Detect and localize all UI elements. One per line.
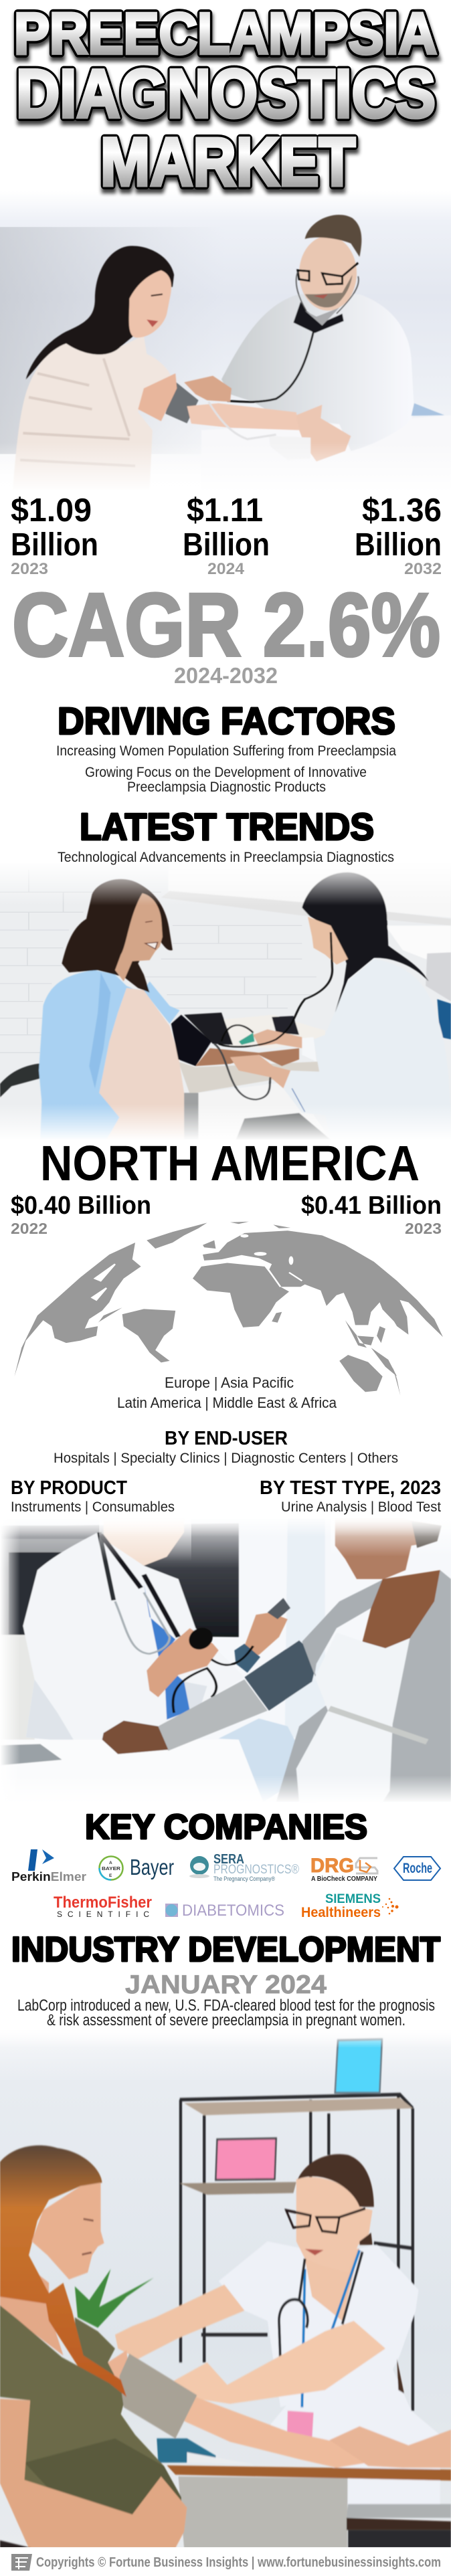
nurse arm lower <box>170 2321 385 2404</box>
pants <box>219 1718 299 1802</box>
patient hand <box>102 1721 168 1754</box>
patient arm <box>195 1048 299 1066</box>
photo: nurse fitting cuff on pregnant woman <box>0 2031 451 2548</box>
market value 2032: $1.36 <box>362 492 442 529</box>
patient hair <box>62 879 173 992</box>
desk <box>179 2476 347 2548</box>
patient hair <box>0 2145 126 2397</box>
by end-user <box>54 1428 398 1466</box>
logo: Bayer: Bayer <box>130 1855 174 1879</box>
doctor head <box>299 236 357 310</box>
tablet <box>184 1012 233 1045</box>
nurse uniform lower <box>270 2366 440 2504</box>
desk clutter <box>157 2438 215 2462</box>
lanyard and stethoscope <box>302 2250 359 2407</box>
heading: key companies: KEY COMPANIES <box>85 1808 367 1847</box>
doctor coat <box>283 959 451 1139</box>
regional value 2022: 2022 <box>11 1220 48 1237</box>
logo: Siemens Healthineers <box>301 1892 399 1920</box>
patient cardigan <box>276 1579 384 1802</box>
patient face <box>115 893 163 982</box>
by product: Instruments | Consumables <box>11 1499 175 1515</box>
by test type <box>260 1477 441 1515</box>
nurse neck <box>305 2248 359 2321</box>
logo: PerkinElmer: PerkinElmer <box>11 1870 86 1883</box>
by test type: Urine Analysis | Blood Test <box>281 1499 441 1515</box>
arm and hands <box>187 403 299 430</box>
doctor shirt <box>221 294 414 451</box>
patient sleeve <box>158 1679 268 1751</box>
market value 2024: 2024 <box>207 560 245 578</box>
nurse uniform upper <box>219 2241 418 2407</box>
other regions: Latin America | Middle East & Africa <box>117 1394 337 1411</box>
doctor hand and bulb <box>147 1628 219 1697</box>
by test type: BY TEST TYPE, 2023 <box>260 1477 441 1499</box>
logo: Thermo Fisher Scientific <box>54 1894 152 1919</box>
logo: Roche <box>394 1857 440 1880</box>
regional value 2023: 2023 <box>405 1220 442 1237</box>
patient tee <box>0 2305 181 2514</box>
logo: Diabetomics: DIABETOMICS <box>182 1902 284 1920</box>
market value 2032 <box>355 492 442 578</box>
glasses <box>298 263 358 284</box>
market value 2023 <box>11 492 98 578</box>
logo: Thermo Fisher Scientific: ThermoFisher <box>54 1894 152 1912</box>
collar and stethoscope <box>293 302 344 333</box>
footer logo <box>11 2554 32 2571</box>
date: JANUARY 2024 <box>125 1970 327 1999</box>
logo: Siemens Healthineers: Healthineers <box>301 1905 381 1920</box>
hand from right <box>329 2426 451 2468</box>
black cuff <box>171 1015 211 1066</box>
frames <box>335 2039 382 2093</box>
patient face <box>31 2183 104 2280</box>
logo: Sera Prognostics <box>189 1852 299 1882</box>
badge <box>287 2411 314 2438</box>
by end-user: Hospitals | Specialty Clinics | Diagnostic Centers | Others <box>54 1451 398 1466</box>
other regions <box>117 1374 337 1411</box>
logo: Bayer <box>99 1855 174 1880</box>
by end-user: BY END-USER <box>165 1428 288 1449</box>
logo: Thermo Fisher Scientific: SCIENTIFIC <box>57 1910 149 1919</box>
cuff <box>165 382 199 424</box>
CAGR period: 2024-2032 <box>174 663 278 688</box>
latest trends text: Technological Advancements in Preeclampsia Diagnostics <box>58 850 394 865</box>
patient chest <box>0 2262 64 2355</box>
market value 2023: 2023 <box>11 560 48 578</box>
logo: DRG: A BioCheck COMPANY <box>311 1875 377 1883</box>
blood pressure cuff <box>244 1641 318 1711</box>
stethoscope <box>99 1532 114 1600</box>
logo: PerkinElmer <box>11 1849 86 1883</box>
title: MARKET <box>101 128 356 204</box>
market value 2024 <box>183 492 270 578</box>
logo: DRG: DRG <box>310 1855 354 1877</box>
market value 2023: $1.09 <box>11 492 92 529</box>
regional value 2022: $0.40 Billion <box>11 1192 151 1220</box>
development text <box>17 1997 435 2029</box>
dark background <box>0 1524 239 1637</box>
doctor hands <box>230 1029 302 1089</box>
title: MARKET <box>100 124 355 200</box>
nurse hair <box>298 2154 374 2207</box>
heading: latest trends: LATEST TRENDS <box>80 806 374 848</box>
patient neck <box>363 1570 440 1648</box>
cabinets <box>168 863 451 918</box>
market value 2024: $1.11 <box>187 492 263 529</box>
footer bar <box>0 2547 451 2576</box>
scrubs <box>144 1584 190 1720</box>
logo: Siemens Healthineers: SIEMENS <box>325 1892 381 1906</box>
woman sweater <box>13 335 171 490</box>
patient forearm <box>0 2399 187 2548</box>
by product: BY PRODUCT <box>11 1477 127 1499</box>
nurse arm upper <box>115 2284 244 2359</box>
cuff <box>119 2354 197 2438</box>
table <box>0 1740 263 1802</box>
nurse face <box>296 2177 373 2272</box>
driving factors text: Preeclampsia Diagnostic Products <box>127 779 326 795</box>
logo: Sera Prognostics: SERA <box>213 1852 244 1867</box>
patient tee <box>99 988 184 1139</box>
table top <box>167 2466 451 2480</box>
shelf <box>180 2094 413 2411</box>
doctor hair <box>302 872 428 1012</box>
heading: industry development: INDUSTRY DEVELOPMENT <box>11 1930 440 1969</box>
logo: DRG <box>310 1855 377 1883</box>
logo: Bayer: E <box>109 1873 112 1878</box>
logo: Sera Prognostics: The Pregnancy Company® <box>213 1875 275 1882</box>
patient head <box>335 1519 440 1579</box>
market value 2032: 2032 <box>404 560 442 578</box>
woman hair <box>26 246 174 379</box>
patient arm outstretched <box>184 2397 368 2468</box>
stethoscope <box>219 932 333 1046</box>
logo: Bayer: BAYER <box>102 1865 121 1871</box>
clutter on counter <box>224 1015 325 1048</box>
doctor face <box>308 917 348 965</box>
market value 2032: Billion <box>355 527 442 563</box>
patient tee <box>296 1633 410 1802</box>
market value 2023: Billion <box>11 527 98 563</box>
chair <box>0 1063 40 1097</box>
driving factors text: Increasing Women Population Suffering from Preeclampsia <box>56 743 396 759</box>
patient shirt <box>39 970 180 1139</box>
title <box>14 1 438 204</box>
regional value 2022 <box>11 1192 151 1237</box>
regional value 2023 <box>301 1192 442 1237</box>
belt <box>329 1708 427 1742</box>
table <box>179 1062 319 1094</box>
woman face <box>129 270 171 338</box>
heading: driving factors: DRIVING FACTORS <box>58 700 395 743</box>
by product <box>11 1477 175 1515</box>
driving factors text: Growing Focus on the Development of Innovative <box>85 765 367 780</box>
glasses <box>286 2209 365 2233</box>
photo: doctor measuring blood pressure of pregnant patient <box>0 1517 451 1803</box>
doctor coat <box>23 1532 244 1744</box>
driving factors text <box>56 743 396 795</box>
logo: Bayer: A <box>109 1861 112 1865</box>
logo: Sera Prognostics: PROGNOSTICS® <box>213 1863 299 1877</box>
photo: doctor checking woman's blood pressure <box>0 191 451 493</box>
world map <box>14 1222 443 1396</box>
logo: Roche: Roche <box>403 1861 432 1876</box>
plant <box>75 2269 154 2328</box>
heading: north america: NORTH AMERICA <box>40 1135 420 1191</box>
regional value 2023: $0.41 Billion <box>301 1192 442 1220</box>
other regions: Europe | Asia Pacific <box>165 1374 294 1391</box>
title: MARKET <box>100 124 355 200</box>
table <box>201 416 451 490</box>
photo: pregnant patient with doctor and cuff <box>0 861 451 1141</box>
market value 2024: Billion <box>183 527 270 563</box>
monitor device <box>269 436 310 460</box>
doctor head <box>104 1519 184 1566</box>
